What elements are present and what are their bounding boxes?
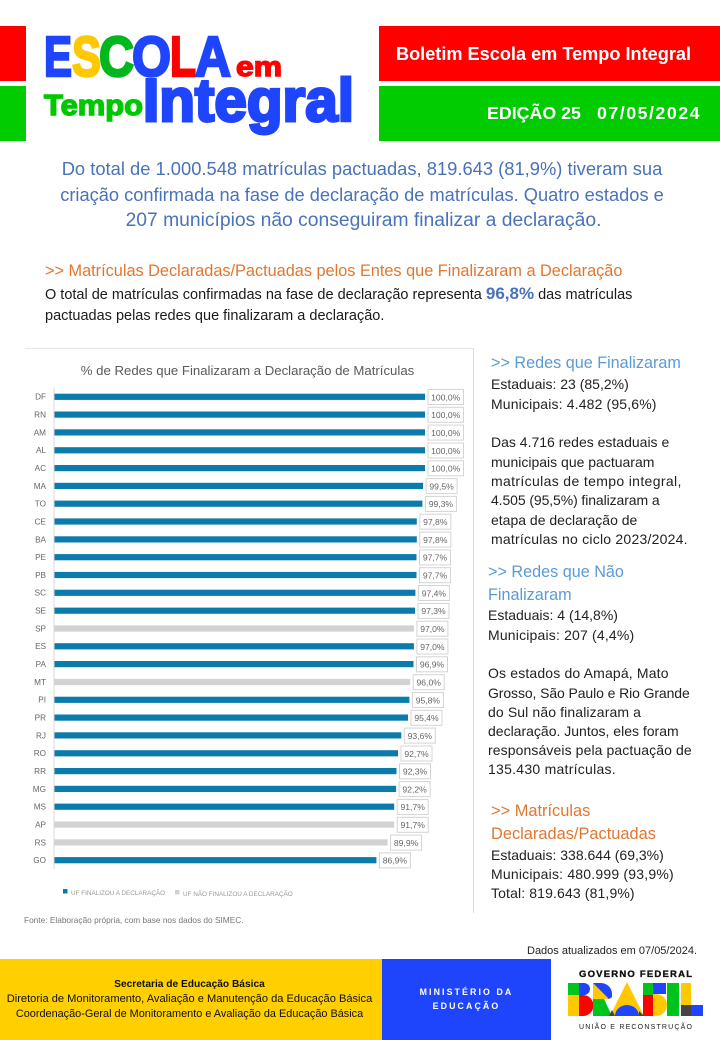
side panel: redes que nao finalizaram: 135.430 matrículas. — [488, 761, 616, 777]
side panel: redes que finalizaram: Municipais: 4.482 (95,6%) — [491, 396, 657, 412]
bar chart: SC — [35, 589, 46, 598]
bar chart: 92,3% — [403, 767, 428, 777]
bar chart: PB — [35, 571, 47, 580]
bar chart: 97,3% — [421, 606, 446, 616]
logo: Escola em Tempo Integral — [44, 30, 354, 136]
chart legend — [63, 888, 293, 898]
side panel: matriculas declaradas — [491, 802, 674, 901]
bar chart: MT — [34, 678, 46, 687]
I — [667, 983, 679, 1016]
side panel: redes que nao finalizaram: Finalizaram — [488, 586, 572, 604]
bar chart: RN — [34, 410, 46, 420]
bar chart: 100,0% — [431, 446, 461, 456]
bar chart: RR — [34, 767, 46, 776]
bar chart: 97,7% — [423, 570, 448, 580]
bar chart: TO — [35, 500, 46, 509]
logo: Escola em Tempo Integral: em — [236, 51, 282, 82]
bar chart: 95,4% — [414, 713, 439, 723]
side panel: redes que finalizaram: matrículas no ciclo 2023/2024. — [491, 531, 688, 547]
red header block left — [0, 26, 26, 81]
bar chart: 99,5% — [429, 481, 454, 491]
footer: yellow secretaria block: Secretaria de Educação Básica — [114, 979, 265, 990]
logo: Escola em Tempo Integral: Tempo — [44, 90, 143, 122]
bar chart: RJ — [36, 731, 46, 740]
chart legend: UF NÃO FINALIZOU A DECLARAÇÃO — [183, 889, 293, 898]
section heading: >> Matrículas Declaradas/Pactuadas pelos Entes que Finalizaram a Declaração — [45, 262, 622, 280]
side panel: redes que nao finalizaram: do Sul não finalizaram a — [488, 704, 641, 720]
bar chart: AP — [35, 820, 47, 830]
header banner: title — [379, 26, 720, 81]
bar chart: 100,0% — [431, 428, 461, 438]
section text: pactuadas pelas redes que finalizaram a declaração. — [45, 308, 384, 324]
bar chart: 97,7% — [423, 553, 448, 563]
side panel: redes que finalizaram: matrículas de tempo integral, — [491, 473, 682, 489]
side panel: matriculas declaradas: >> Matrículas — [491, 802, 590, 820]
side panel: redes que nao finalizaram: >> Redes que Não — [488, 563, 624, 581]
bar chart: 86,9% — [383, 856, 407, 866]
footer: blue ministry block: MINISTÉRIO DA — [420, 987, 513, 997]
logo: Governo Federal Brasil: UNIÃO E RECONSTRUÇÃO — [579, 1022, 693, 1031]
bar chart: ES — [35, 642, 47, 651]
side panel: matriculas declaradas: Estaduais: 338.644 (69,3%) — [491, 846, 664, 862]
update note: Dados atualizados em 07/05/2024. — [527, 945, 697, 957]
bar chart: AL — [36, 446, 46, 455]
intro text: criação confirmada na fase de declaração de matrículas. Quatro estados e — [60, 184, 664, 205]
S — [643, 983, 653, 995]
bar chart: PE — [35, 553, 47, 562]
header banner: edition: 07/05/2024 — [597, 103, 701, 123]
A — [610, 982, 644, 1016]
footer: blue ministry block — [382, 959, 551, 1040]
side panel: redes que finalizaram: Estaduais: 23 (85,2%) — [491, 376, 629, 392]
bar chart: 91,7% — [401, 802, 425, 812]
side panel: redes que finalizaram: municipais que pactuaram — [491, 454, 654, 470]
bar chart: 97,8% — [423, 517, 448, 527]
side panel: matriculas declaradas: Total: 819.643 (81,9%) — [491, 885, 635, 901]
header banner: title: Boletim Escola em Tempo Integral — [396, 44, 691, 64]
side panel: redes que nao finalizaram: Grosso, São Paulo e Rio Grande — [488, 684, 690, 700]
bar chart: 97,8% — [423, 535, 448, 545]
bar chart: 96,9% — [420, 660, 445, 670]
intro text — [60, 158, 664, 231]
bar chart: 97,0% — [420, 642, 445, 652]
bar chart: MA — [34, 482, 47, 491]
bar chart: 95,8% — [416, 695, 440, 705]
intro text: 207 municípios não conseguiram finalizar a declaração. — [126, 210, 601, 231]
bar chart: 97,4% — [422, 588, 446, 598]
logo: Escola em Tempo Integral: Integral — [143, 67, 354, 134]
intro text: Do total de 1.000.548 matrículas pactuadas, 819.643 (81,9%) tiveram sua — [62, 158, 662, 179]
side panel: redes que nao finalizaram: Municipais: 207 (4,4%) — [488, 626, 634, 642]
logo: Governo Federal Brasil: GOVERNO FEDERAL — [579, 969, 692, 980]
logo: Governo Federal Brasil — [568, 969, 703, 1031]
bar chart: RS — [35, 838, 47, 847]
bar chart: 99,3% — [429, 499, 453, 509]
R — [593, 983, 612, 999]
bar chart: DF — [35, 393, 46, 402]
bar chart: 89,9% — [394, 838, 419, 848]
bar chart: SE — [35, 607, 47, 616]
bar chart: 100,0% — [431, 410, 461, 420]
side panel: redes que nao finalizaram: Estaduais: 4 (14,8%) — [488, 607, 618, 623]
side panel: redes que nao finalizaram: responsáveis pela pactuação de — [488, 742, 692, 758]
bar chart: 91,7% — [401, 820, 425, 830]
footer: yellow secretaria block: Coordenação-Geral de Monitoramento e Avaliação da Educação Básica — [16, 1008, 363, 1020]
bar chart — [25, 348, 474, 913]
bar chart: AM — [34, 428, 46, 437]
chart title: % de Redes que Finalizaram a Declaração de Matrículas — [81, 363, 415, 378]
side panel: redes que finalizaram — [491, 354, 688, 547]
bar chart: GO — [33, 856, 46, 865]
footer: yellow secretaria block — [0, 959, 382, 1040]
bar chart: PR — [35, 714, 46, 722]
side panel: redes que finalizaram: >> Redes que Finalizaram — [491, 354, 681, 372]
bar chart: 97,0% — [420, 624, 445, 634]
bar chart: PI — [38, 696, 46, 705]
bar chart: PA — [36, 660, 47, 669]
side panel: redes que finalizaram: Das 4.716 redes estaduais e — [491, 434, 669, 450]
bar chart: 92,2% — [402, 784, 427, 794]
section text — [45, 284, 632, 324]
side panel: matriculas declaradas: Declaradas/Pactuadas — [491, 825, 656, 843]
bar chart: AC — [35, 464, 46, 473]
B — [568, 983, 579, 995]
side panel: redes que finalizaram: etapa de declaração de — [491, 512, 637, 528]
side panel: redes que nao finalizaram — [488, 563, 692, 777]
L — [681, 983, 691, 1005]
source note: Fonte: Elaboração própria, com base nos dados do SIMEC. — [24, 915, 244, 925]
side panel: redes que nao finalizaram: Os estados do Amapá, Mato — [488, 665, 669, 681]
header banner: edition: EDIÇÃO 25 — [487, 103, 581, 123]
side panel: redes que finalizaram: 4.505 (95,5%) finalizaram a — [491, 492, 660, 508]
bar chart: CE — [35, 517, 47, 526]
bar chart: BA — [35, 535, 47, 544]
section text: O total de matrículas confirmadas na fase de declaração representa 96,8% das matrículas — [45, 284, 632, 303]
bar chart: 92,7% — [404, 749, 429, 759]
bar chart: 100,0% — [431, 464, 461, 474]
green header block left — [0, 86, 26, 141]
side panel: redes que nao finalizaram: declaração. Juntos, eles foram — [488, 723, 679, 739]
chart legend: UF FINALIZOU A DECLARAÇÃO — [71, 888, 165, 897]
bar chart: MG — [33, 785, 46, 794]
bar chart: RO — [34, 749, 46, 758]
bar chart: 93,6% — [408, 731, 432, 741]
bar chart: SP — [35, 624, 47, 633]
bar chart: MS — [34, 803, 47, 812]
footer: yellow secretaria block: Diretoria de Monitoramento, Avaliação e Manutenção da Educação Básica — [7, 993, 372, 1005]
side panel: matriculas declaradas: Municipais: 480.999 (93,9%) — [491, 866, 674, 882]
bar chart: 100,0% — [431, 392, 461, 402]
footer: blue ministry block: EDUCAÇÃO — [433, 1001, 500, 1011]
bar chart: 96,0% — [417, 678, 441, 688]
header banner: edition — [379, 86, 720, 141]
